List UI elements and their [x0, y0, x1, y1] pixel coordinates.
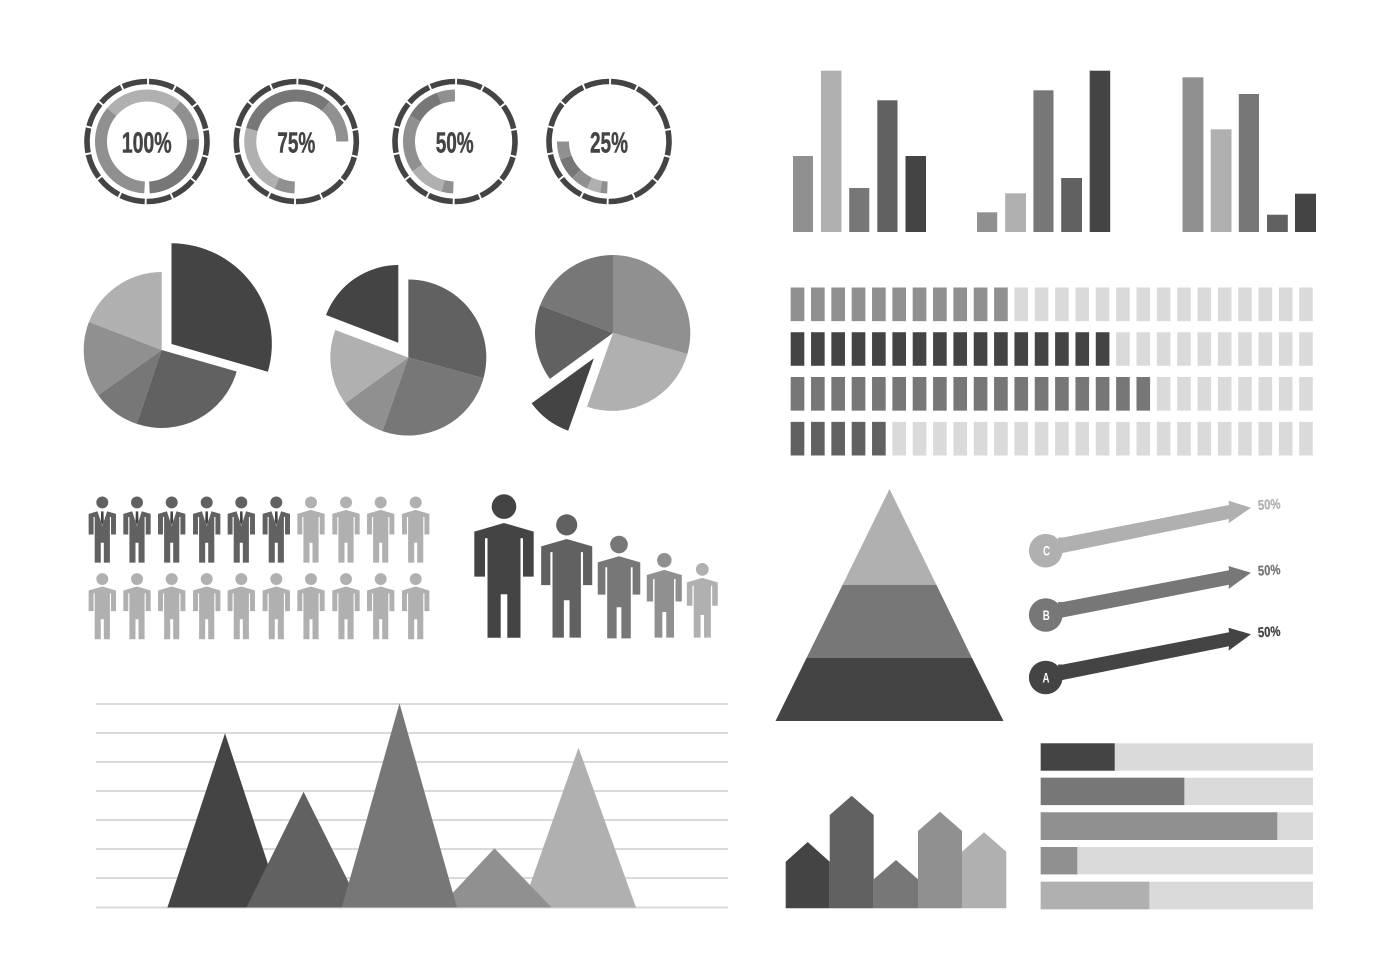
panel: segmented block progress rows	[791, 304, 1313, 439]
panel: mountain chart	[96, 703, 728, 908]
arrow B	[1029, 561, 1281, 632]
bar chart 2	[977, 71, 1110, 232]
bar chart 3	[1182, 77, 1316, 232]
pie chart: narrow slice exploded bottom left	[532, 255, 690, 431]
ring: 25%	[544, 76, 674, 207]
bar row 1	[1041, 743, 1313, 771]
arrow B: 50%	[1257, 561, 1281, 579]
panel: horizontal progress bars	[1041, 743, 1313, 909]
bar row 4	[1041, 847, 1313, 874]
panel: house-shaped bars	[786, 796, 1006, 908]
panel: percentage rings	[82, 76, 674, 207]
arrow A	[1029, 623, 1281, 694]
ring: 100%: 100%	[122, 127, 172, 159]
panel: descending size figures	[474, 494, 718, 638]
panel: lollipop arrows	[1029, 495, 1281, 694]
row 1: six suited and four plain figures	[89, 496, 429, 563]
bar row 2	[1041, 778, 1313, 805]
row 3: 18 of 26 blocks	[791, 377, 1313, 411]
arrow C: 50%	[1257, 495, 1281, 513]
ring: 100%	[82, 77, 212, 206]
panel: pie charts	[84, 243, 690, 436]
ring: 50%	[391, 77, 519, 206]
bar chart 1	[793, 71, 926, 232]
panel: pyramid	[776, 489, 1004, 721]
arrow A: 50%	[1257, 623, 1281, 640]
ring: 25%: 25%	[590, 127, 628, 159]
ring: 75%	[231, 77, 361, 206]
panel: vertical bar charts	[793, 71, 1316, 232]
arrow C: C	[1043, 543, 1050, 559]
arrow A: A	[1042, 670, 1050, 686]
bar row 5	[1041, 882, 1313, 909]
bar row 3	[1041, 812, 1313, 840]
ring: 75%: 75%	[277, 127, 315, 159]
panel: business people pictogram	[89, 496, 429, 639]
pie chart: slice exploded top left	[326, 265, 486, 436]
ring: 50%: 50%	[436, 127, 474, 159]
pie chart: large slice exploded top right	[84, 243, 272, 428]
row 4: 5 of 26 blocks	[791, 422, 1313, 456]
arrow B: B	[1043, 607, 1050, 623]
arrow C	[1029, 495, 1281, 568]
row 2: ten plain figures	[89, 573, 429, 639]
row 2: 16 of 26 blocks	[791, 332, 1313, 366]
row 1: 11 of 26 blocks	[791, 287, 1313, 321]
